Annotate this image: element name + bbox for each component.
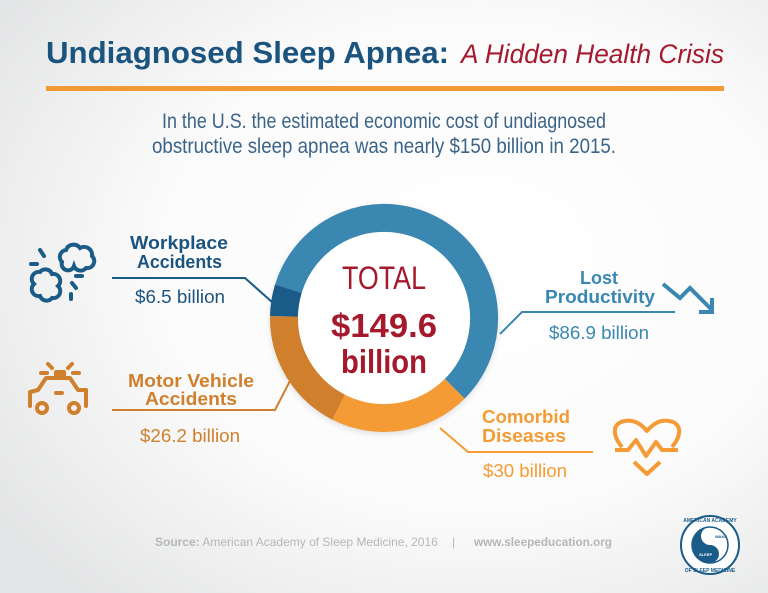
subtitle: In the U.S. the estimated economic cost of undiagnosed: [162, 110, 606, 133]
total label: $149.6: [331, 307, 437, 344]
logo: AASM: [681, 516, 739, 574]
callout: motor vehicle accidents: Motor Vehicle: [128, 371, 254, 391]
callout: motor vehicle accidents: [112, 371, 292, 446]
subtitle: obstructive sleep apnea was nearly $150 billion in 2015.: [152, 135, 616, 158]
callout: comorbid diseases: Comorbid: [482, 407, 570, 427]
logo: AASM: WAKE: [715, 534, 727, 539]
icon: downward trend arrow: [663, 284, 712, 312]
logo: AASM: AMERICAN ACADEMY: [683, 518, 737, 524]
callout: lost productivity: $86.9 billion: [549, 323, 649, 343]
total label: billion: [341, 343, 427, 380]
icon: heart with pulse: [615, 421, 679, 474]
callout: comorbid diseases: Diseases: [482, 426, 566, 446]
source text: |: [452, 535, 455, 549]
callout: workplace accidents: $6.5 billion: [135, 287, 225, 307]
source text: [155, 535, 612, 549]
icon: car: [30, 364, 86, 413]
donut chart: [284, 218, 484, 420]
callout: lost productivity: [500, 268, 675, 343]
subtitle: [152, 110, 616, 158]
source text: Source: American Academy of Sleep Medicine, 2016: [155, 535, 438, 549]
title: A Hidden Health Crisis: [459, 39, 724, 69]
title underline: [46, 86, 724, 91]
callout: workplace accidents: Accidents: [137, 252, 222, 272]
source text: www.sleepeducation.org: [473, 535, 612, 549]
callout: motor vehicle accidents: Accidents: [145, 389, 237, 409]
callout: lost productivity: Lost: [580, 268, 618, 288]
total label: [331, 260, 437, 380]
total label: TOTAL: [342, 260, 426, 296]
callout: motor vehicle accidents: $26.2 billion: [140, 426, 240, 446]
title: [46, 35, 724, 70]
callout: workplace accidents: Workplace: [130, 233, 228, 253]
logo: AASM: OF SLEEP MEDICINE: [685, 568, 736, 574]
callout: comorbid diseases: [440, 407, 593, 481]
logo: AASM: SLEEP: [699, 552, 712, 557]
title: Undiagnosed Sleep Apnea:: [46, 35, 449, 70]
callout: comorbid diseases: $30 billion: [483, 461, 567, 481]
callout: workplace accidents: [112, 233, 272, 307]
callout: lost productivity: Productivity: [545, 287, 655, 307]
icon: explosion clouds: [31, 245, 94, 301]
